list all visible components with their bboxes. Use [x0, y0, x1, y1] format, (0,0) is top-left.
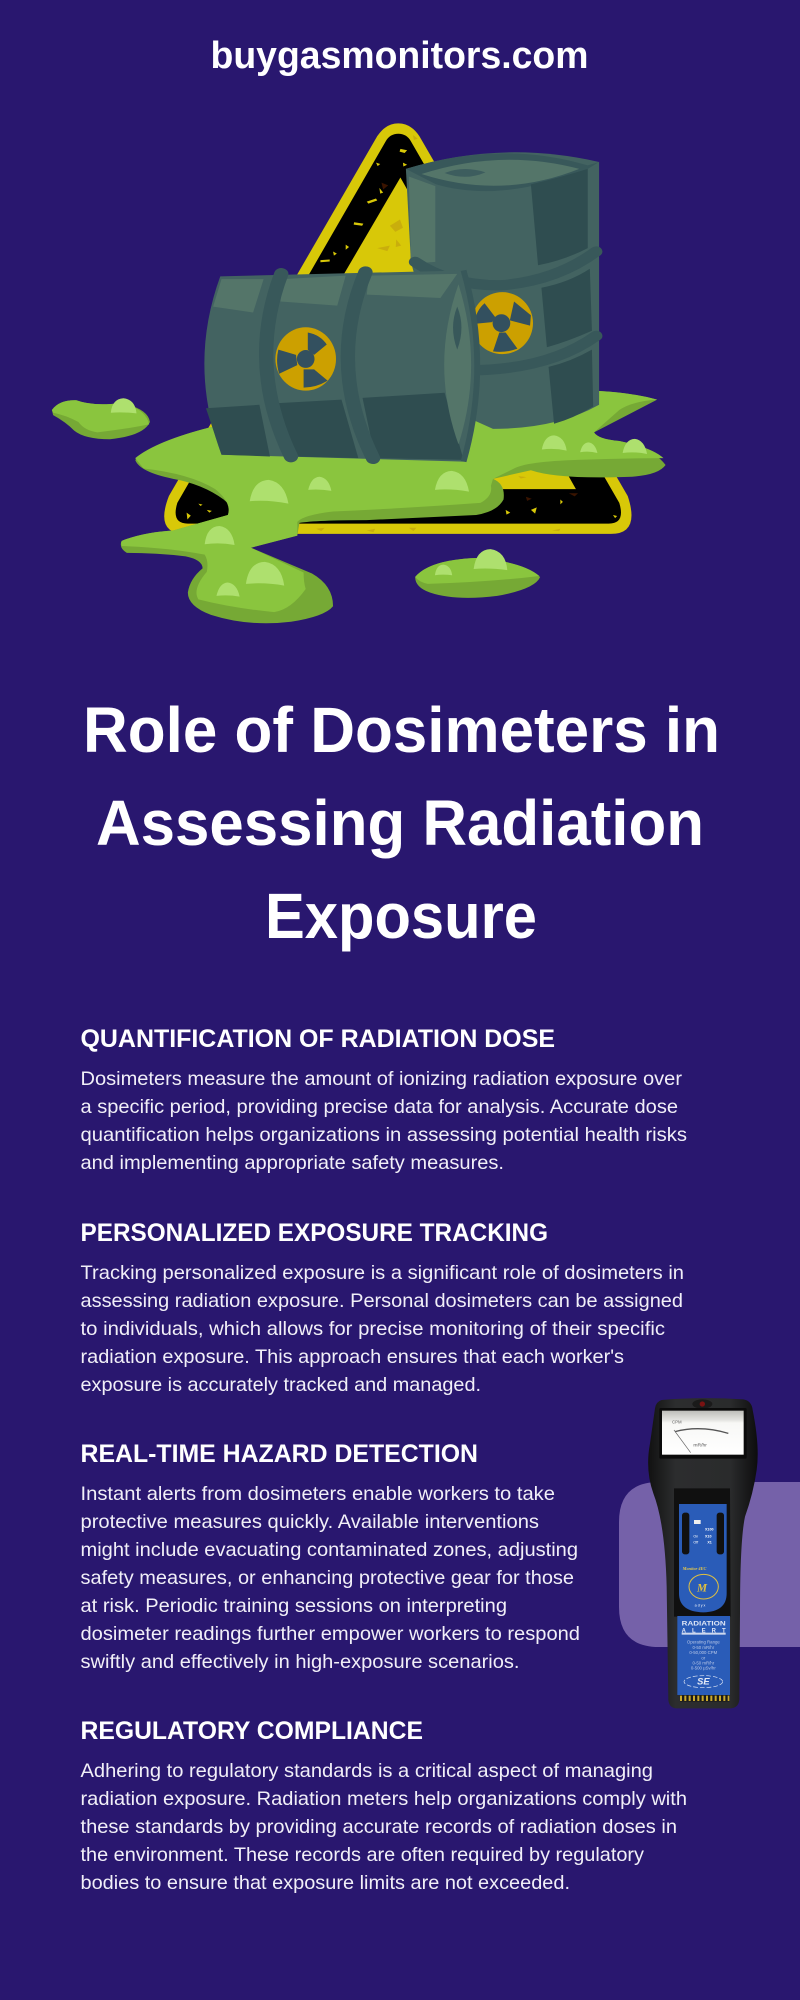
icon: radiation monitor device: X10	[705, 1534, 712, 1538]
body text: to individuals, which allows for precise monitoring of their specific	[80, 1318, 665, 1340]
icon: radiation monitor device: Off	[693, 1540, 699, 1544]
body text: swiftly and effectively in high-exposure scenarios.	[80, 1651, 520, 1673]
section: real-time hazard detection	[80, 1440, 580, 1673]
warning triangle	[164, 123, 631, 534]
body text: protective measures quickly. Available interventions	[80, 1511, 539, 1533]
body text	[80, 1068, 687, 1174]
icon: radiation monitor device: X100	[705, 1527, 714, 1531]
title: Role of Dosimeters in	[83, 694, 720, 766]
body text	[80, 1760, 687, 1894]
body text: might include evacuating contaminated zones, adjusting	[80, 1539, 578, 1561]
body text: a specific period, providing precise data for analysis. Accurate dose	[80, 1096, 678, 1118]
green spill: right blob	[415, 558, 540, 598]
body text: the environment. These records are often required by regulatory	[80, 1844, 644, 1866]
icon: radiation monitor device: 0-50,000 CPM	[689, 1650, 718, 1655]
body text: Tracking personalized exposure is a significant role of dosimeters in	[80, 1262, 684, 1284]
icon: radiation monitor device: M	[696, 1582, 708, 1594]
icon: radiation monitor device: adyx	[695, 1604, 706, 1608]
body text	[80, 1483, 580, 1673]
body text: safety measures, or enhancing protective gear for those	[80, 1567, 574, 1589]
spill bubbles	[111, 398, 647, 597]
title: Exposure	[265, 880, 537, 952]
body text: Dosimeters measure the amount of ionizing radiation exposure over	[80, 1068, 683, 1090]
body text: dosimeter readings further empower workers to respond	[80, 1623, 580, 1645]
body text: radiation exposure. Radiation meters help organizations comply with	[80, 1788, 687, 1810]
icon: radiation monitor device: 0-500 µSv/hr	[691, 1666, 716, 1671]
icon: radiation monitor device: ALERT	[682, 1628, 726, 1634]
heading: REAL-TIME HAZARD DETECTION	[80, 1440, 478, 1468]
radiation symbol	[472, 292, 533, 354]
title: Assessing Radiation	[96, 787, 704, 859]
body text: these standards by providing accurate records of radiation doses in	[80, 1816, 677, 1838]
body text: radiation exposure. This approach ensures that each worker's	[80, 1346, 624, 1368]
icon: radiation monitor device: 0-50 mR/hr	[693, 1660, 715, 1665]
icon: radiation monitor device: SE	[697, 1677, 710, 1687]
icon: radiation monitor device: Operating Range	[687, 1639, 720, 1644]
title	[83, 694, 720, 952]
icon: radiation monitor device: Monitor 4EC	[682, 1566, 706, 1571]
body text: and implementing appropriate safety measures.	[80, 1152, 504, 1174]
illustration: toxic barrels and spill	[52, 123, 666, 623]
section: personalized exposure tracking	[80, 1219, 684, 1396]
radiation symbol	[275, 327, 336, 391]
upright barrel	[406, 152, 599, 429]
body text: assessing radiation exposure. Personal dosimeters can be assigned	[80, 1290, 683, 1312]
icon: radiation monitor device: On	[693, 1534, 698, 1538]
section: quantification of radiation dose	[80, 1025, 687, 1174]
body text: quantification helps organizations in assessing potential health risks	[80, 1124, 687, 1146]
body text: Instant alerts from dosimeters enable workers to take	[80, 1483, 555, 1505]
section: regulatory compliance	[80, 1717, 687, 1894]
body text: exposure is accurately tracked and managed.	[80, 1374, 481, 1396]
fallen barrel	[204, 270, 477, 462]
icon: radiation monitor device: RADIATION	[682, 1621, 726, 1628]
icon: radiation monitor device: X1	[707, 1540, 712, 1544]
icon: radiation monitor device: CPM	[672, 1420, 682, 1425]
body text: Adhering to regulatory standards is a critical aspect of managing	[80, 1760, 653, 1782]
decorative panel behind device	[619, 1482, 800, 1647]
site name: buygasmonitors.com	[210, 35, 588, 77]
green spill: left blob	[52, 400, 150, 439]
heading: REGULATORY COMPLIANCE	[80, 1717, 423, 1745]
icon: radiation monitor device: or	[701, 1655, 706, 1660]
icon: radiation monitor device: mR/hr	[693, 1442, 707, 1448]
green spill: main puddle	[121, 391, 666, 623]
icon: radiation monitor device: 0-50 mR/hr	[693, 1645, 715, 1650]
body text: at risk. Periodic training sessions on interpreting	[80, 1595, 507, 1617]
icon: radiation monitor device	[648, 1398, 758, 1708]
heading: PERSONALIZED EXPOSURE TRACKING	[80, 1219, 548, 1247]
heading: QUANTIFICATION OF RADIATION DOSE	[80, 1025, 555, 1053]
body text	[80, 1262, 684, 1396]
body text: bodies to ensure that exposure limits are not exceeded.	[80, 1872, 570, 1894]
